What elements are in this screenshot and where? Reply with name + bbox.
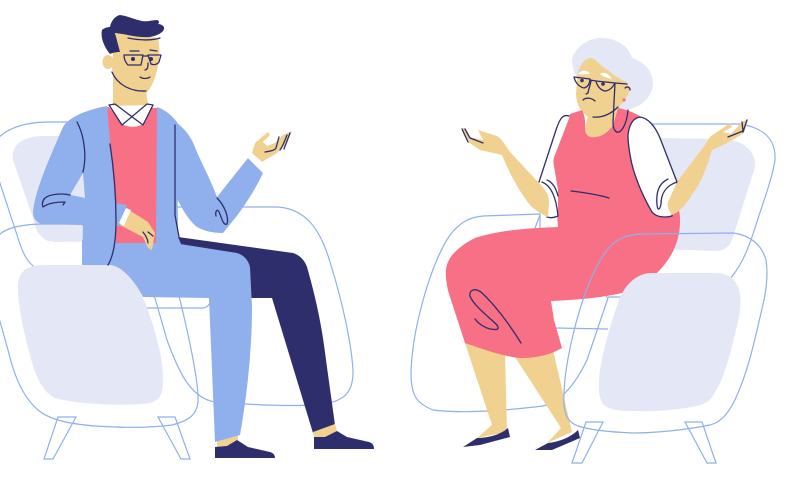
seat cushion (599, 273, 740, 411)
sweater (107, 107, 159, 243)
eyebrows (130, 50, 157, 51)
face details (574, 71, 630, 132)
pupils (580, 79, 584, 82)
earring (622, 98, 626, 102)
seat lines (535, 215, 625, 329)
chair front legs (44, 417, 190, 459)
face and neck (576, 58, 630, 137)
chair back (0, 122, 205, 268)
face (112, 33, 159, 92)
hair (102, 15, 164, 54)
woman's armchair back (411, 124, 775, 412)
back cushion (13, 136, 110, 242)
far leg (178, 237, 335, 433)
raised hand (248, 131, 292, 173)
cuff near (119, 208, 131, 226)
face details (112, 38, 161, 91)
jacket left panel and sleeve (33, 106, 116, 265)
rear seat edge line (147, 300, 211, 308)
far sleeve (176, 122, 263, 233)
jacket right panel (156, 107, 181, 245)
left arm and hand (462, 128, 549, 217)
man's armchair (0, 122, 353, 459)
rear seat (411, 214, 608, 412)
chair rear seat (100, 207, 353, 405)
back cushion (660, 138, 755, 251)
neck (113, 72, 148, 106)
ear (102, 55, 114, 69)
near forearm (60, 195, 127, 226)
chair legs (572, 422, 716, 463)
mouth (583, 98, 595, 101)
woman (446, 38, 748, 450)
glasses (574, 77, 627, 91)
shirt and collar (108, 104, 153, 127)
shoes (463, 428, 580, 450)
near hand (120, 210, 155, 250)
nose (586, 81, 591, 94)
jaw line (112, 72, 146, 91)
jaw line (593, 107, 618, 117)
right sleeve (628, 117, 677, 217)
eyebrows (578, 71, 612, 79)
near leg (82, 240, 252, 442)
left sleeve (539, 116, 570, 217)
chair shell (564, 233, 767, 433)
pupils (131, 57, 135, 61)
glasses (124, 55, 161, 65)
legs (465, 343, 572, 443)
back shell (640, 124, 775, 284)
far shoe (314, 431, 374, 449)
chair front shell (0, 224, 198, 427)
left sleeve outline (539, 116, 569, 218)
dress (446, 108, 680, 358)
near shoe (215, 440, 275, 458)
nose (145, 63, 148, 70)
hair (572, 38, 653, 110)
man (33, 15, 374, 458)
jacket fold lines (42, 122, 228, 265)
forehead line (128, 38, 160, 40)
ear (625, 87, 630, 90)
dress fold lines (470, 191, 609, 343)
glasses cord (613, 83, 628, 132)
socks (217, 424, 337, 447)
seat cushion (18, 265, 163, 405)
woman's front armchair (564, 233, 767, 463)
mouth (140, 77, 150, 78)
right arm and hand (657, 119, 748, 215)
